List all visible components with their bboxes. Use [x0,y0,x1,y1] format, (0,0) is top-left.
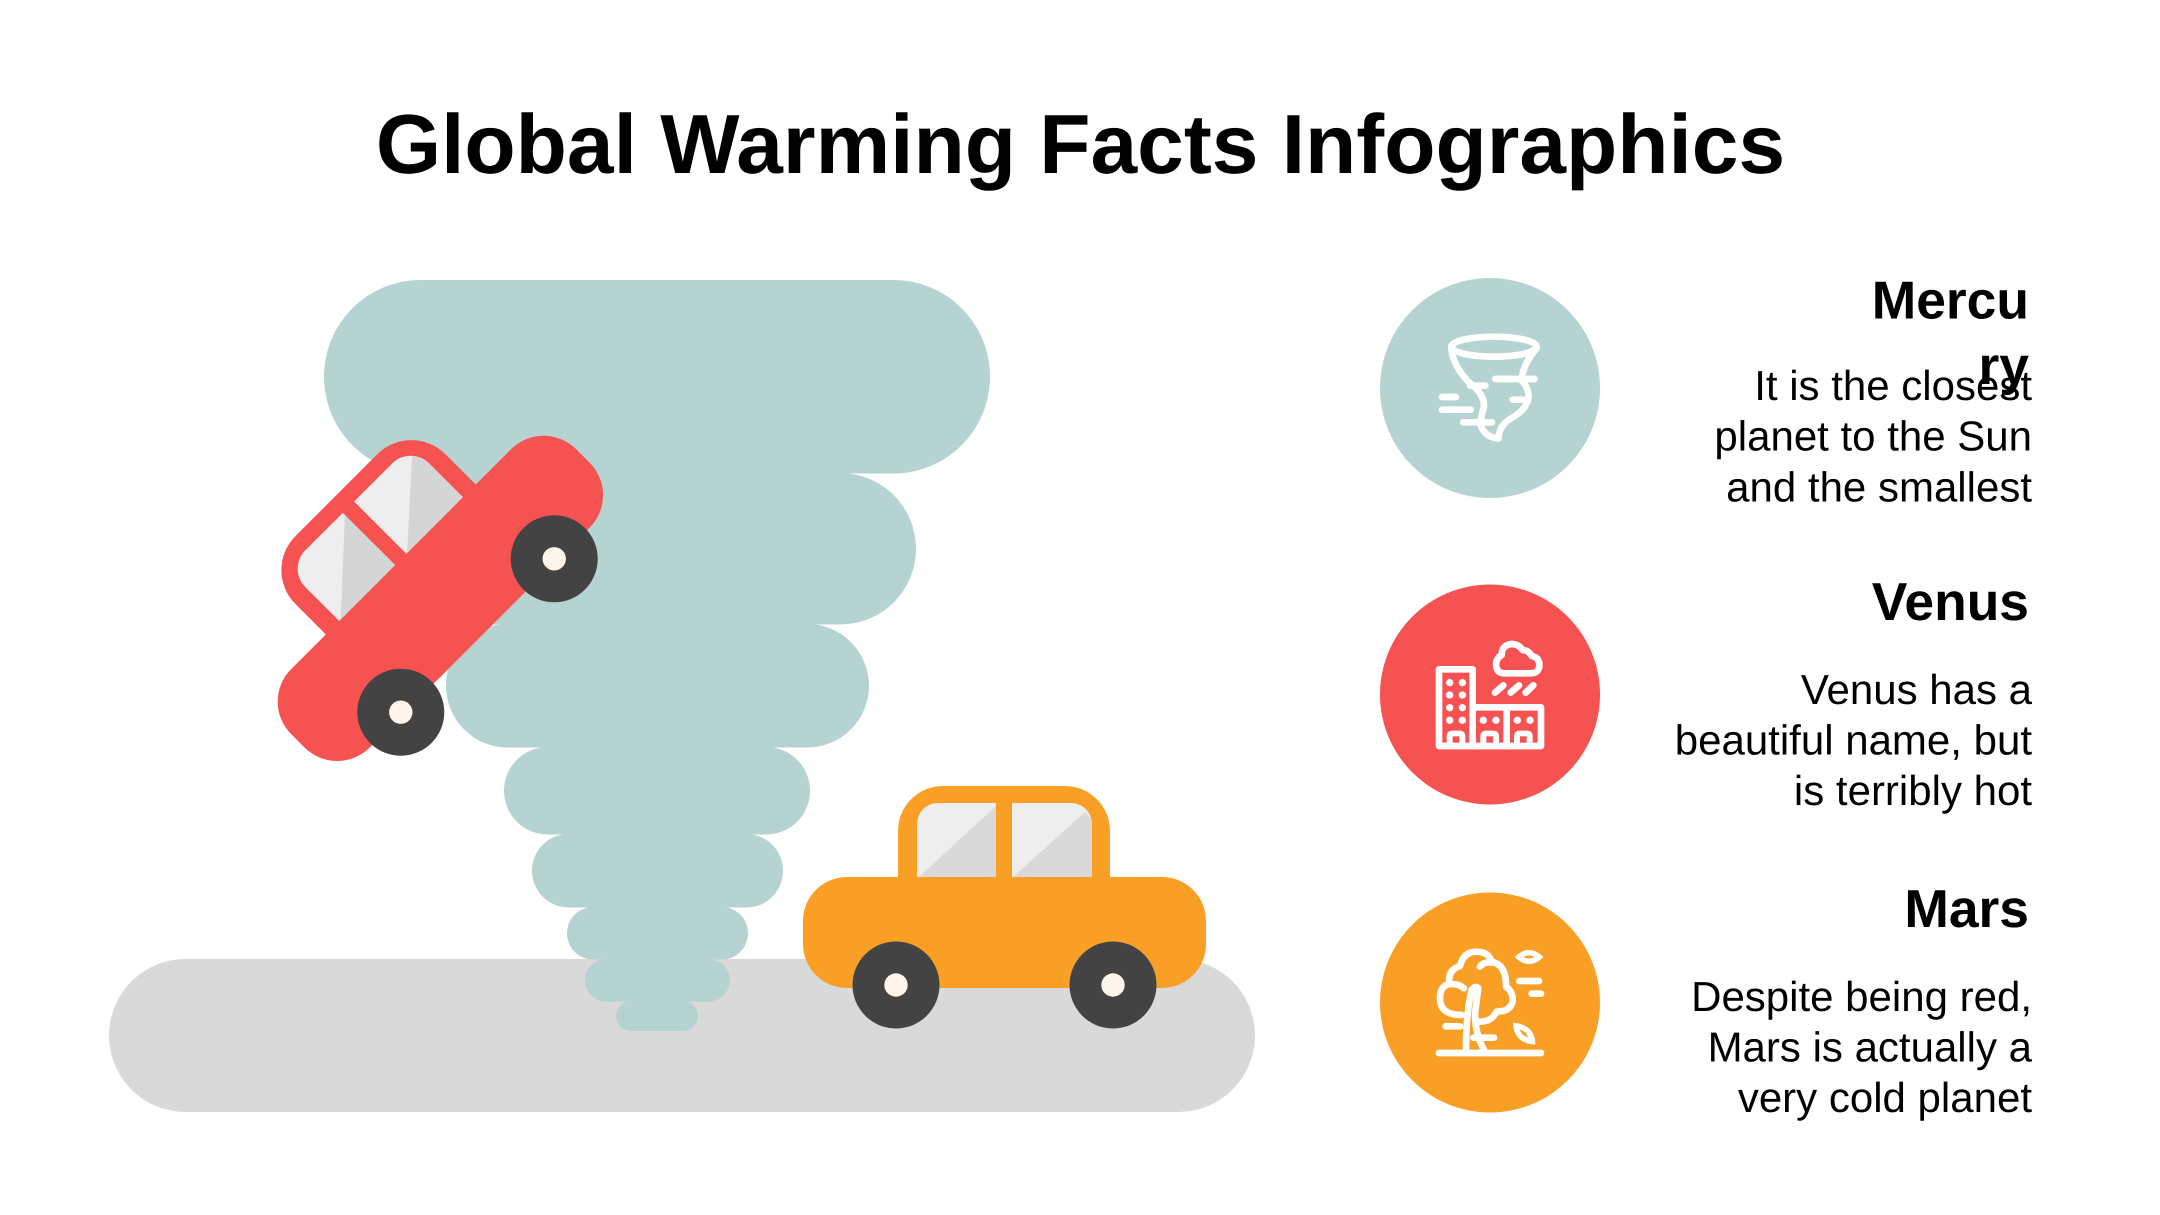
text: Venus description: Venus has a [1801,666,2032,713]
text: Mars description: Mars is actually a [1708,1024,2033,1070]
heading: Mercury: Mercu [1872,272,2029,330]
icon: tornado badge [1380,278,1600,498]
heading: Mars: Mars [1904,880,2029,939]
text: Venus description: is terribly hot [1794,767,2032,814]
panel: Mars [1380,880,2033,1121]
text: Venus description: beautiful name, but [1675,717,2032,764]
panel: Mercury [1380,272,2032,510]
panel: Venus [1380,573,2033,814]
tornado illustration [324,280,990,1031]
red car lifted by the tornado [194,352,651,809]
icon: windblown tree badge [1380,892,1600,1112]
ground [109,959,1255,1112]
text: Mars description: very cold planet [1738,1074,2032,1121]
icon: city rain badge [1380,584,1600,804]
title: Global Warming Facts Infographics [376,97,1785,191]
heading: Venus: Venus [1872,573,2029,632]
text: Mercury description: planet to the Sun [1714,413,2032,460]
text: Mars description: Despite being red, [1691,973,2032,1020]
orange car on the ground [803,786,1206,1028]
text: Mercury description: and the smallest [1726,463,2032,510]
text: Mercury description: It is the closest [1754,362,2032,409]
heading: Mercury: ry [1979,337,2029,396]
